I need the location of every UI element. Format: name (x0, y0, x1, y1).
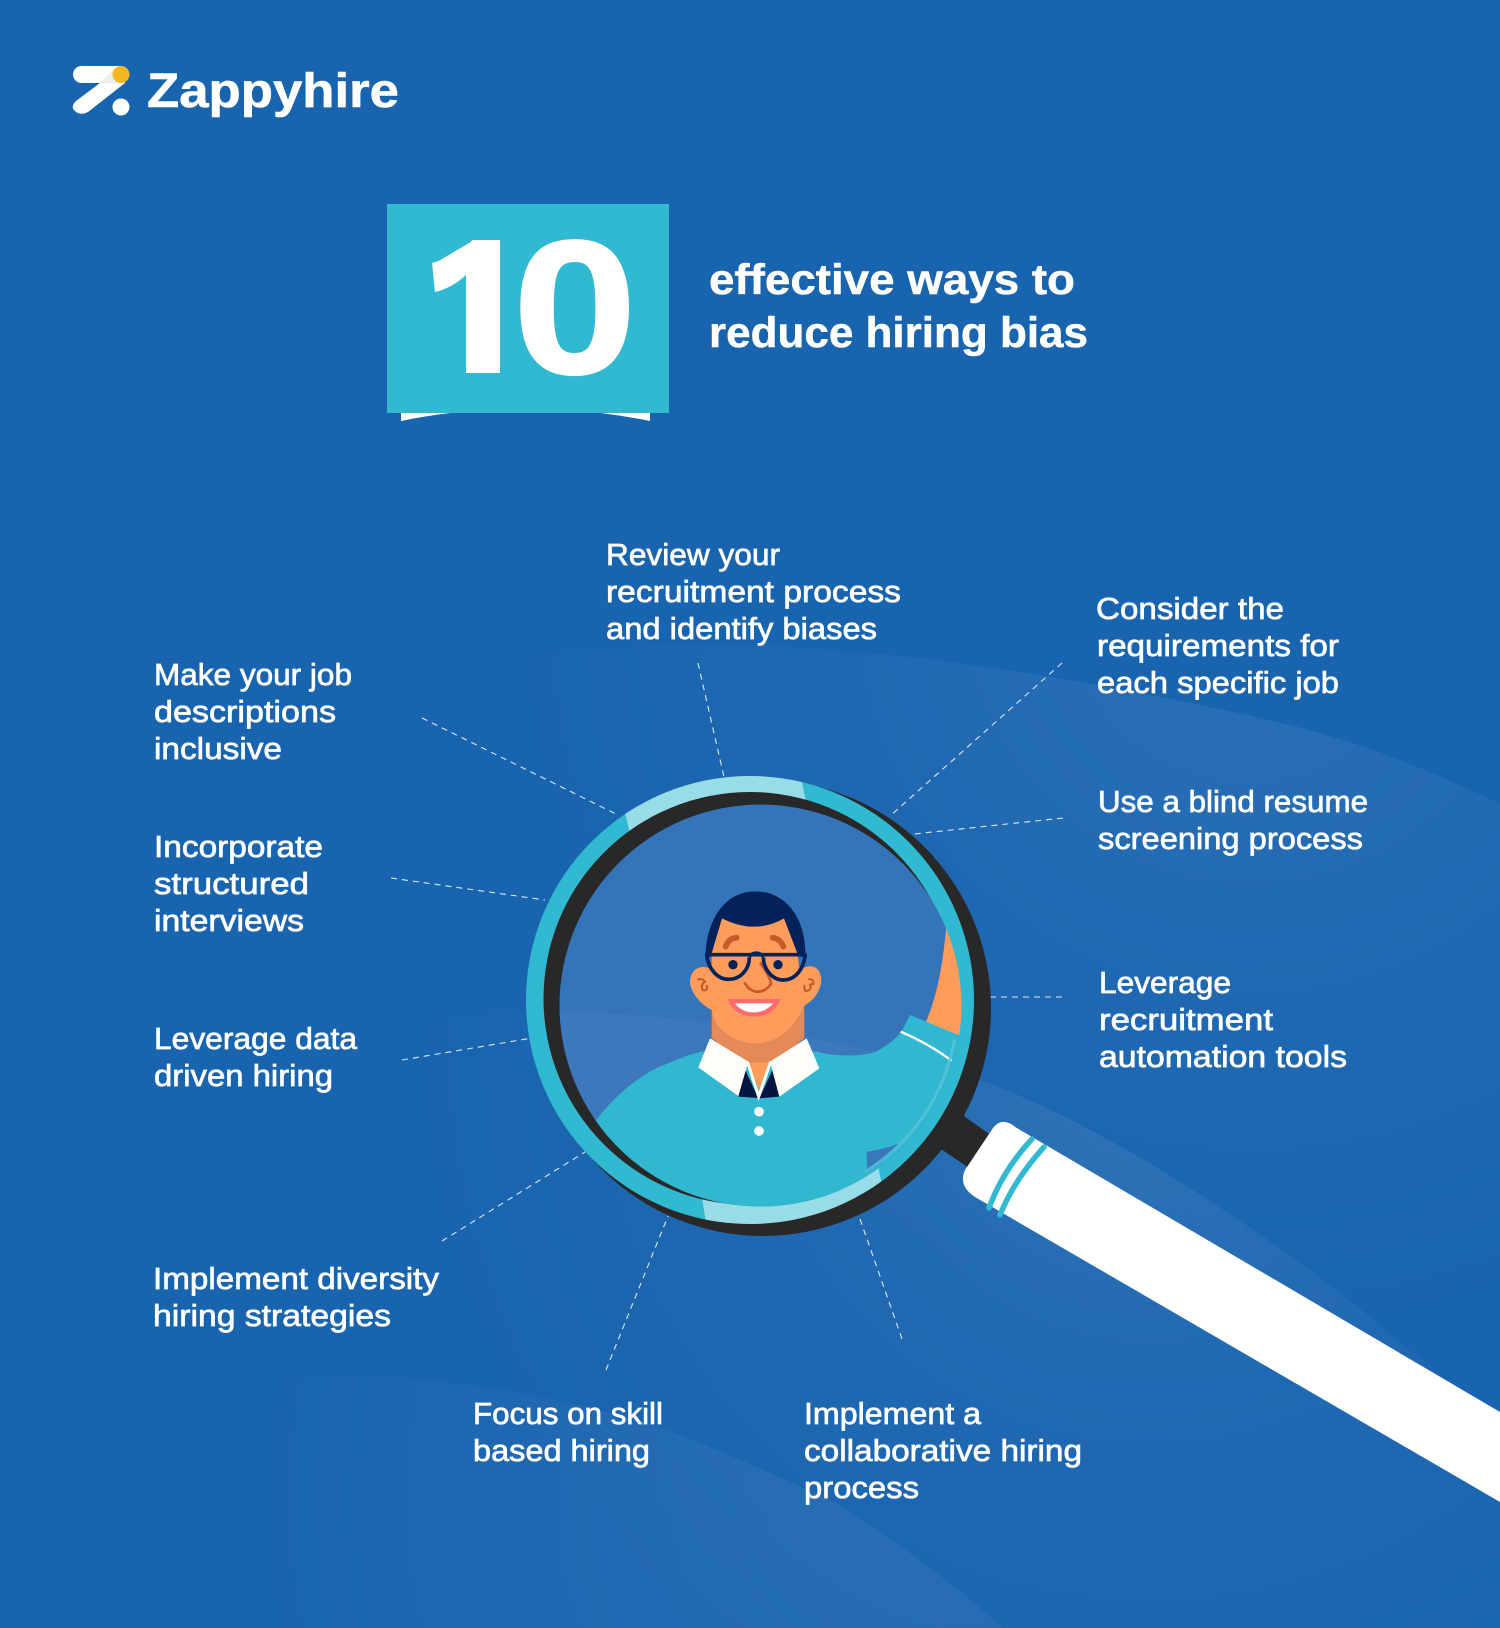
neck (712, 1006, 804, 1063)
ring highlights (622, 760, 890, 1235)
eyebrows (726, 938, 783, 947)
dashed connector lines (391, 663, 1063, 1370)
text: Make your job descriptions inclusive: inclusive (154, 731, 282, 766)
tie (738, 1069, 779, 1098)
text: Focus on skill based hiring (473, 1396, 663, 1468)
inner black ring (544, 792, 956, 1205)
teal ring (526, 776, 974, 1224)
title block: number 10 (387, 201, 669, 421)
gap under arm (867, 1142, 903, 1172)
text: Make your job descriptions inclusive (154, 657, 352, 766)
ear details (697, 979, 707, 990)
text: Leverage recruitment automation tools (1099, 965, 1347, 1074)
text: Review your recruitment process: recruitment process (606, 574, 901, 609)
text: Leverage recruitment automation tools: Leverage (1099, 965, 1231, 1000)
arm (926, 923, 962, 1038)
text: Implement diversity hiring strategies: hiring strategies (153, 1298, 391, 1333)
glasses (705, 953, 807, 980)
icon: Zappyhire mark (73, 66, 130, 116)
hair (705, 891, 805, 957)
sleeve stripe (901, 1032, 952, 1061)
text: Consider the requirements: requirements for (1097, 628, 1339, 663)
sweater (596, 1015, 960, 1206)
text: Make your job descriptions inclusive: Make your job (154, 657, 352, 692)
eyes (728, 960, 738, 969)
text: Incorporate structured interviews: interviews (154, 903, 304, 938)
text: Incorporate structured interviews: Incorporate (154, 829, 323, 864)
text: Incorporate structured interviews (154, 829, 323, 938)
text: Implement a collaborative hiring process: collaborative hiring (804, 1433, 1082, 1468)
text: Focus on skill based hiring: Focus on skill (473, 1396, 663, 1431)
text: Consider the requirements: each specific job (1097, 665, 1339, 700)
text: Consider the requirements: Consider the (1096, 591, 1284, 626)
text: Use a blind resume (1098, 784, 1368, 856)
person illustration (596, 891, 962, 1206)
lens glare (865, 1040, 954, 1172)
text: Leverage data driven hiring: driven hiring (154, 1058, 333, 1093)
text: Consider the requirements (1096, 591, 1339, 700)
text: Implement a collaborative hiring process: process (804, 1470, 919, 1505)
heading (709, 256, 1088, 357)
face (712, 918, 804, 1043)
magnifying glass (526, 776, 1500, 1502)
text: Use a blind resume: screening process (1098, 821, 1363, 856)
handle bands (989, 1139, 1044, 1215)
heading: reduce hiring bias (709, 309, 1088, 357)
text: Implement a collaborative hiring process: Implement a (804, 1396, 982, 1431)
text: Review your recruitment process: Review your (606, 537, 780, 572)
text: Leverage data driven hiring: Leverage data (154, 1021, 358, 1056)
text: Incorporate structured interviews: structured (154, 866, 309, 901)
ears (690, 967, 712, 1010)
text: Focus on skill based hiring: based hiring (473, 1433, 650, 1468)
outer black ring (535, 780, 991, 1236)
collar (698, 1038, 819, 1097)
heading: effective ways to (709, 256, 1075, 304)
mouth (727, 999, 781, 1017)
title block: number 10: 1 (420, 202, 536, 414)
text: Leverage recruitment automation tools: automation tools (1099, 1039, 1347, 1074)
text: Implement a collaborative hiring process (804, 1396, 1082, 1505)
text: Implement diversity hiring strategies (153, 1261, 440, 1333)
text: Review your recruitment process: and identify biases (606, 611, 877, 646)
text: Implement diversity hiring strategies: Implement diversity (153, 1261, 440, 1296)
text: Review your recruitment process (606, 537, 901, 646)
handle stem (935, 1112, 995, 1172)
buttons (754, 1107, 764, 1116)
logo wordmark: Zappyhire (147, 65, 399, 118)
logo: Zappyhire (73, 65, 399, 118)
text: Leverage recruitment automation tools: recruitment (1099, 1002, 1273, 1037)
lens (560, 804, 962, 1206)
text: Make your job descriptions inclusive: descriptions (154, 694, 336, 729)
title block: number 10: 0 (513, 201, 637, 413)
nose (745, 963, 771, 992)
text: Use a blind resume: Use a blind resume (1098, 784, 1368, 819)
handle (963, 1122, 1500, 1502)
text: Leverage data driven hiring (154, 1021, 358, 1093)
